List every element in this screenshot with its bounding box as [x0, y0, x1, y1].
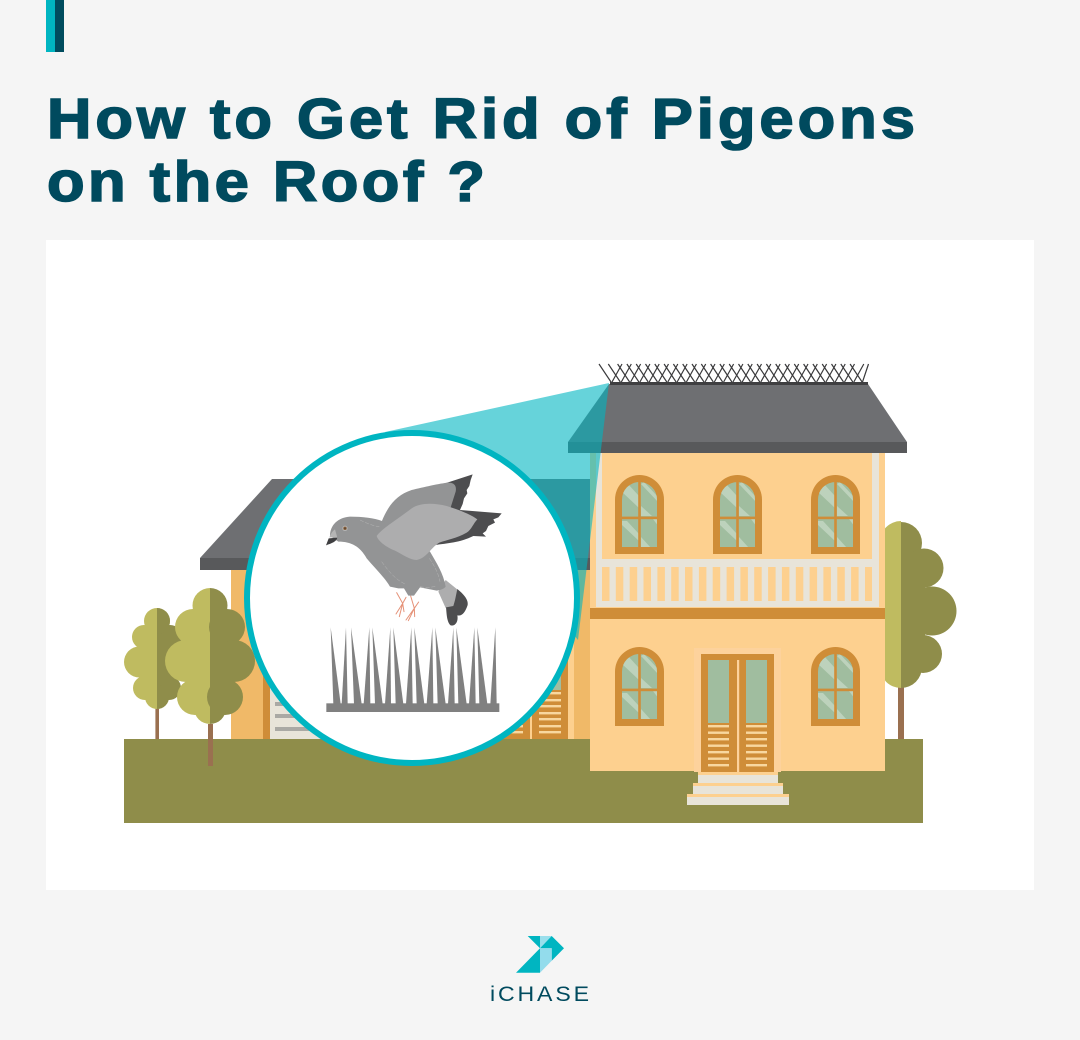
pigeon tail: [438, 580, 458, 608]
small tree: [124, 608, 190, 739]
upper windows: [615, 475, 860, 554]
pigeon wing tips: [435, 474, 502, 545]
left house: [200, 479, 590, 739]
right house wall: [590, 453, 885, 771]
pigeon near wing: [377, 504, 477, 560]
pigeon cere: [329, 529, 337, 538]
bird spikes: [326, 627, 499, 712]
pigeon: [326, 474, 502, 626]
left house garage: [263, 600, 360, 739]
pigeon feather marks: [360, 520, 440, 587]
balcony: [596, 453, 879, 607]
left house roof: [200, 479, 590, 570]
accent bar: [46, 0, 64, 52]
title: How to Get Rid of Pigeons: [47, 86, 915, 150]
logo wordmark: iCHASE: [490, 982, 589, 1006]
lower windows: [615, 647, 860, 726]
trees: left pair: [124, 588, 255, 766]
title: [47, 86, 915, 213]
pigeon beak: [326, 538, 337, 545]
magnifier beam: [385, 383, 609, 640]
pigeon eye: [342, 526, 348, 531]
right house: [568, 364, 907, 805]
front door: [694, 648, 781, 772]
front steps: [687, 772, 789, 805]
pigeon body: [330, 517, 446, 596]
panel: illustration background: [46, 240, 1034, 890]
right house roof: [568, 382, 907, 453]
logo mark: [516, 936, 564, 973]
pigeon legs: [396, 593, 419, 621]
ground: [124, 739, 923, 823]
tree: far right: [880, 521, 956, 742]
left house wall: [231, 570, 590, 739]
left house door: [488, 640, 574, 739]
title: on the Roof ?: [47, 149, 485, 213]
pigeon far wing: [382, 483, 456, 547]
magnifier circle: [247, 433, 577, 763]
anti-bird wire on ridge: [599, 364, 868, 382]
logo: [490, 936, 589, 1006]
floor band: [590, 608, 885, 619]
large tree: [165, 588, 255, 766]
